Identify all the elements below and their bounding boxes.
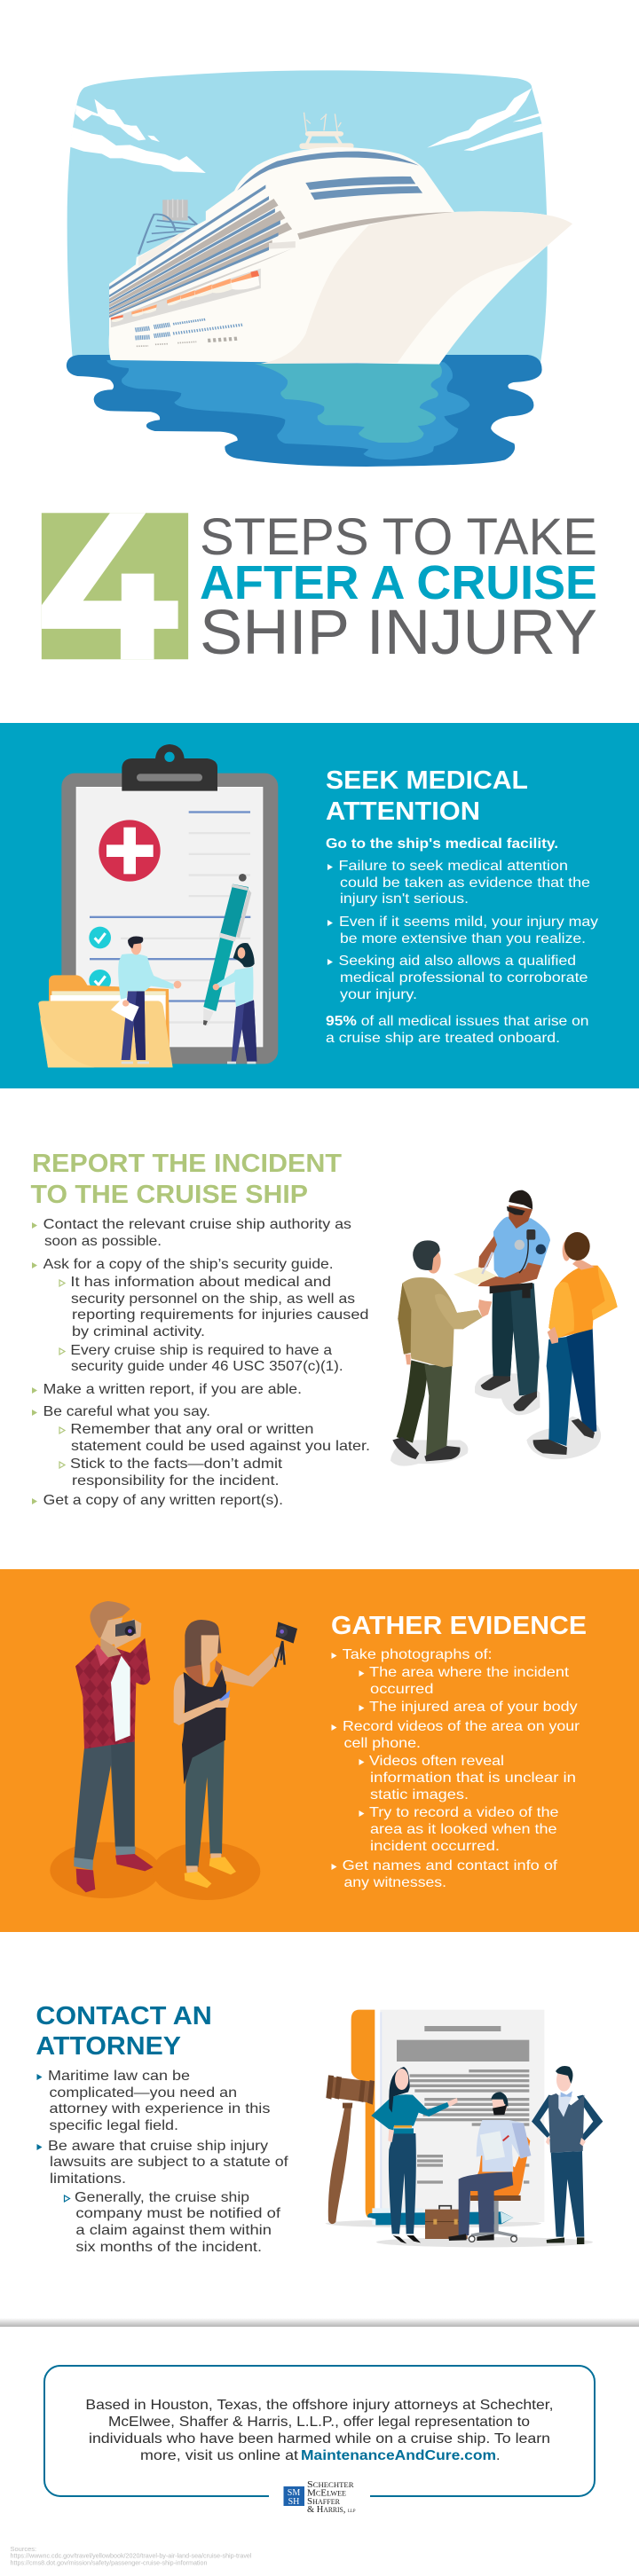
bullet list: The injured area of your body bbox=[369, 1700, 578, 1715]
pen and papers bbox=[367, 2208, 513, 2225]
deck shadow strip bbox=[297, 212, 454, 240]
bullet list: Ask for a copy of the ship’s security guide. bbox=[43, 1257, 334, 1272]
balcony stripes bbox=[109, 185, 296, 320]
section divider shadow bbox=[0, 2318, 639, 2327]
firm description bbox=[85, 2398, 553, 2463]
man with camera bbox=[74, 1601, 154, 1892]
woman attorney bbox=[371, 2067, 458, 2243]
bullet list: It has information about medical and bbox=[70, 1275, 331, 1290]
bullet list: Record videos of the area on your bbox=[343, 1719, 580, 1734]
firm description: individuals who have been harmed while on a cruise ship. To learn bbox=[89, 2431, 550, 2446]
clouds bbox=[70, 88, 543, 173]
bullet list: Seeking aid also allows a qualified bbox=[339, 954, 576, 969]
firm description: Based in Houston, Texas, the offshore injury attorneys at Schechter, bbox=[85, 2398, 553, 2413]
bullet list: security personnel on the ship, as well as bbox=[71, 1292, 355, 1307]
woman with camera bbox=[174, 1620, 286, 1888]
illustration: legal team with document bbox=[326, 2010, 603, 2247]
bullet list: attorney with experience in this bbox=[50, 2101, 270, 2117]
check marks bbox=[89, 927, 111, 992]
firm logo: Shaffer bbox=[307, 2496, 341, 2507]
bridge windows bbox=[305, 177, 422, 200]
sea: dark water bbox=[67, 355, 542, 467]
bullet list: Be careful what you say. bbox=[43, 1404, 210, 1419]
bullet list bbox=[332, 1647, 580, 1890]
lifeboat recess bbox=[111, 269, 261, 327]
bullet list: specific legal field. bbox=[50, 2118, 178, 2133]
man in orange sweater bbox=[533, 1232, 618, 1455]
lifeboats bbox=[111, 271, 259, 322]
bullet list: Make a written report, if you are able. bbox=[43, 1382, 302, 1397]
bullet list: The area where the incident bbox=[369, 1665, 570, 1680]
tripod camera bbox=[275, 1622, 297, 1667]
panel: seek medical attention: ATTENTION bbox=[326, 797, 480, 826]
bullet list: be more extensive than you realize. bbox=[340, 931, 586, 946]
sky bbox=[67, 70, 548, 366]
bullet list: cell phone. bbox=[344, 1736, 421, 1751]
bullet list: soon as possible. bbox=[44, 1234, 162, 1249]
legal document bbox=[380, 2010, 544, 2222]
title line 1: STEPS TO TAKE bbox=[200, 508, 597, 566]
bullet list: incident occurred. bbox=[370, 1839, 500, 1854]
briefcase bbox=[425, 2206, 468, 2239]
title line 2: AFTER A CRUISE bbox=[200, 556, 597, 609]
sources: Sources: bbox=[11, 2545, 36, 2553]
bullet list: medical professional to corroborate bbox=[340, 970, 588, 986]
portholes bbox=[135, 319, 244, 346]
bullet list: statement could be used against you later. bbox=[71, 1439, 370, 1454]
panel: gather evidence bbox=[0, 1569, 639, 1932]
bullet list: Get a copy of any written report(s). bbox=[43, 1493, 283, 1508]
firm logo bbox=[284, 2479, 356, 2515]
floor shadows bbox=[326, 2219, 593, 2247]
bullet list: Failure to seek medical attention bbox=[339, 859, 568, 874]
bullet list: area as it looked when the bbox=[370, 1822, 557, 1837]
firm logo: McElwee bbox=[307, 2487, 346, 2498]
rounded outline bbox=[44, 2366, 595, 2496]
hero illustration: cruise ship bbox=[67, 70, 572, 467]
mast and antennas bbox=[299, 113, 353, 149]
bullet list: company must be notified of bbox=[75, 2206, 281, 2221]
bullet list bbox=[37, 2069, 288, 2255]
panel: seek medical attention bbox=[0, 723, 639, 1088]
sea: ship reflection bbox=[255, 364, 442, 443]
bullet list: Remember that any oral or written bbox=[70, 1422, 314, 1437]
panel: firm callout bbox=[44, 2366, 595, 2515]
floor shadows bbox=[390, 1373, 601, 1466]
panel: report the incident bbox=[30, 1150, 618, 1508]
woman figure bbox=[213, 943, 256, 1064]
sea: mid water bbox=[106, 360, 469, 459]
subheading: Go to the ship's medical facility. bbox=[326, 836, 558, 852]
illustration: officer and two men bbox=[390, 1190, 618, 1466]
bullet list: complicated—you need an bbox=[50, 2085, 237, 2101]
panel: report the incident: TO THE CRUISE SHIP bbox=[30, 1181, 308, 1209]
book spine bbox=[351, 2010, 375, 2218]
panel: contact an attorney: ATTORNEY bbox=[36, 2032, 181, 2061]
bullet list bbox=[32, 1217, 370, 1508]
paper sheet bbox=[76, 787, 263, 1047]
bullet list: Maritime law can be bbox=[48, 2069, 190, 2084]
standing man in vest bbox=[532, 2066, 603, 2244]
man figure bbox=[111, 937, 181, 1064]
form lines bbox=[90, 811, 250, 1024]
gavel bbox=[326, 2075, 375, 2224]
heading: SEEK MEDICAL bbox=[326, 766, 528, 795]
officer bbox=[454, 1190, 550, 1411]
clip bbox=[122, 744, 217, 791]
man in tan jacket bbox=[392, 1240, 492, 1461]
bullet list: Take photographs of: bbox=[343, 1647, 493, 1662]
big number 4 bbox=[42, 513, 188, 659]
medical cross bbox=[99, 820, 161, 882]
bullet list: Generally, the cruise ship bbox=[75, 2190, 249, 2205]
bullet list: Get names and contact info of bbox=[343, 1858, 558, 1873]
bullet list: Every cruise ship is required to have a bbox=[70, 1343, 332, 1358]
giant pen bbox=[203, 874, 251, 1025]
bullet list: limitations. bbox=[50, 2172, 126, 2187]
bridge arc window bbox=[237, 152, 419, 191]
bullet list: a claim against them within bbox=[75, 2223, 272, 2238]
bullet list: information that is unclear in bbox=[370, 1771, 576, 1786]
bullet list: Videos often reveal bbox=[369, 1754, 504, 1769]
bullet list: Try to record a video of the bbox=[369, 1805, 559, 1820]
bullet list: any witnesses. bbox=[344, 1875, 446, 1890]
illustration: two people photographing bbox=[50, 1601, 297, 1900]
title line 3: SHIP INJURY bbox=[200, 598, 597, 668]
heading: REPORT THE INCIDENT bbox=[32, 1150, 342, 1178]
bullet list: lawsuits are subject to a statute of bbox=[50, 2155, 288, 2170]
firm logo: & Harris, LLP bbox=[307, 2504, 356, 2515]
sources bbox=[11, 2545, 252, 2567]
bullet list bbox=[327, 859, 598, 1002]
heading: GATHER EVIDENCE bbox=[331, 1612, 587, 1640]
sources: https://wwwnc.cdc.gov/travel/yellowbook/2020/travel-by-air-land-sea/cruise-ship-travel bbox=[11, 2551, 252, 2560]
firm description: more, visit us online at bbox=[140, 2448, 299, 2463]
firm logo: SH bbox=[288, 2497, 299, 2507]
folder bbox=[38, 975, 173, 1067]
bullet list: injury isn't serious. bbox=[340, 891, 469, 907]
upper deck block bbox=[138, 232, 185, 266]
bow panel bbox=[261, 211, 572, 364]
bullet list: responsibility for the incident. bbox=[72, 1473, 279, 1488]
firm description: . bbox=[496, 2448, 500, 2463]
firm logo: SM bbox=[288, 2488, 300, 2498]
floor shadows bbox=[50, 1842, 260, 1900]
clipboard illustration bbox=[38, 744, 278, 1067]
panel: contact an attorney bbox=[36, 2002, 603, 2255]
statistic: 95% of all medical issues that arise on bbox=[326, 1014, 589, 1029]
heading: CONTACT AN bbox=[36, 2002, 212, 2030]
funnel bbox=[138, 199, 197, 255]
bullet list: occurred bbox=[370, 1682, 433, 1697]
bullet list: reporting requirements for injuries caused bbox=[72, 1308, 369, 1323]
bullet list: Even if it seems mild, your injury may bbox=[339, 915, 598, 930]
bullet list: Contact the relevant cruise ship authority as bbox=[43, 1217, 351, 1232]
bullet list: Stick to the facts—don’t admit bbox=[70, 1457, 283, 1472]
blue background bbox=[0, 723, 639, 1088]
bullet list: static images. bbox=[370, 1787, 469, 1802]
orange background bbox=[0, 1569, 639, 1932]
title block bbox=[42, 508, 597, 668]
clipboard board bbox=[61, 774, 278, 1064]
firm logo: Schechter bbox=[307, 2479, 354, 2490]
bullet list: could be taken as evidence that the bbox=[340, 876, 590, 891]
ship hull bbox=[109, 147, 572, 365]
firm description: MaintenanceAndCure.com bbox=[301, 2448, 496, 2463]
bullet list: six months of the incident. bbox=[75, 2240, 262, 2255]
bullet list: security guide under 46 USC 3507(c)(1). bbox=[71, 1359, 343, 1374]
bullet list: by criminal activity. bbox=[72, 1324, 205, 1339]
panel: seek medical attention: a cruise ship are treated onboard. bbox=[326, 1031, 560, 1046]
sources: https://cms8.dot.gov/mission/safety/passenger-cruise-ship-information bbox=[11, 2558, 208, 2567]
firm description: McElwee, Shaffer & Harris, L.L.P., offer legal representation to bbox=[108, 2415, 530, 2430]
seated man with chair bbox=[448, 2092, 531, 2242]
bullet list: your injury. bbox=[340, 987, 417, 1002]
bullet list: Be aware that cruise ship injury bbox=[48, 2139, 268, 2154]
